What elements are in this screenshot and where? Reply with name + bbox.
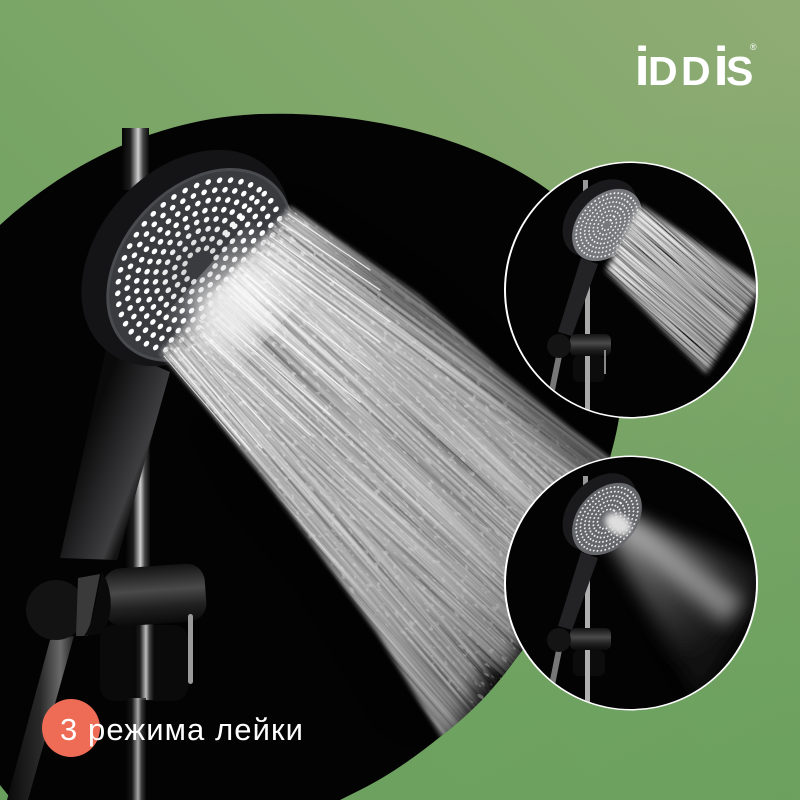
inset bracket [547,334,611,418]
inset water spray [602,202,756,376]
red number badge [42,699,100,757]
logo: iDDiS: i [634,35,650,97]
large black circle photo [0,114,619,800]
inset hose [550,652,562,683]
inset hose [550,358,562,391]
shower rail [100,128,188,800]
logo: iDDiS: S [726,48,753,94]
wall bracket [26,563,208,684]
logo: iDDiS [634,35,757,97]
inset bracket [547,628,611,702]
inset: mist spray mode [504,456,758,710]
logo: iDDiS: ® [750,42,757,52]
handle [60,345,170,560]
inset shower head [562,179,642,262]
shower head nozzle dots [84,147,316,383]
inset handle [558,552,598,630]
shower head housing [39,108,333,408]
inset rail [583,180,590,420]
logo: iDDiS: D [648,48,678,94]
logo: iDDiS: i [714,35,729,97]
logo: iDDiS: D [681,48,711,94]
water spray [158,204,612,738]
inset: rain spray mode [504,162,758,418]
inset rail [583,476,590,720]
caption: 3 modes: 3 режима лейки [60,712,303,747]
inset shower head [562,473,642,556]
hose [7,636,74,800]
inset handle [558,258,598,336]
mist cone [606,512,770,700]
